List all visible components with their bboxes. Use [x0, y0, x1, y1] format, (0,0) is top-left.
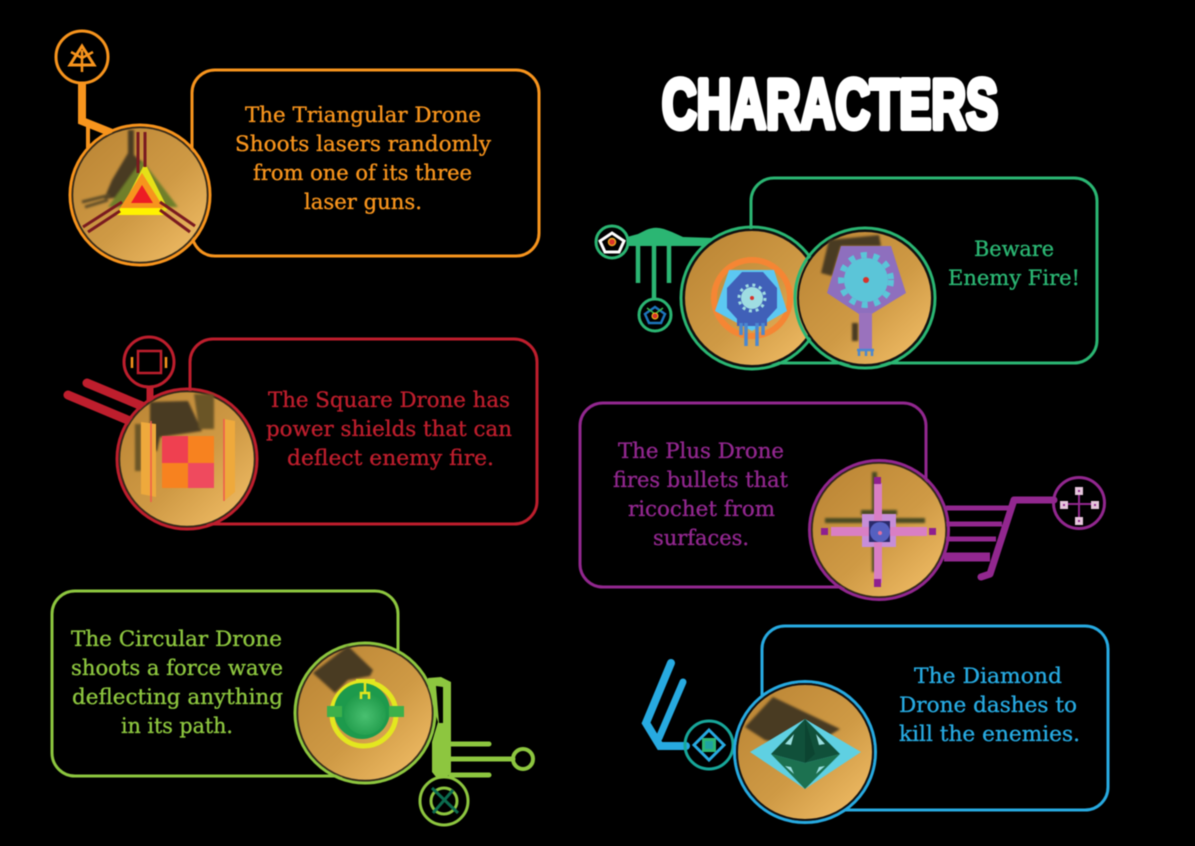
panel: circular drone — [52, 591, 533, 825]
description: diamond drone: Drone dashes to — [899, 693, 1077, 717]
portrait: plus drone — [810, 460, 948, 600]
panel: triangular drone — [56, 31, 539, 265]
panel: square drone — [68, 337, 537, 529]
description: triangular drone: from one of its three — [253, 161, 472, 185]
portrait: shielded pentagon drone — [681, 227, 823, 369]
description: circular drone: The Circular Drone — [71, 627, 282, 651]
panel: plus drone — [580, 403, 1104, 600]
description: circular drone: in its path. — [121, 714, 233, 738]
panel: diamond drone — [646, 626, 1108, 822]
text box: triangular drone — [192, 70, 539, 256]
description: square drone: power shields that can — [266, 417, 512, 441]
portrait: purple pentagon drone — [795, 228, 935, 368]
title: CHARACTERS — [662, 65, 998, 143]
description: square drone — [266, 388, 512, 470]
description: triangular drone: laser guns. — [304, 190, 422, 214]
icon: shielded pentagon badge — [639, 299, 671, 331]
icon: triangle badge — [56, 31, 108, 83]
description: enemy fire: Enemy Fire! — [948, 266, 1080, 290]
description: plus drone — [613, 439, 789, 550]
icon: circle badge — [420, 777, 468, 825]
icon: pentagon badge — [596, 226, 628, 258]
description: plus drone: ricochet from — [628, 497, 775, 521]
portrait: square drone — [117, 389, 257, 529]
description: circular drone: shoots a force wave — [71, 656, 283, 680]
description: plus drone: fires bullets that — [613, 468, 789, 492]
text box: diamond drone — [762, 626, 1108, 810]
connector: triangular drone — [82, 84, 112, 148]
text box: circular drone — [52, 591, 398, 776]
description: square drone: The Square Drone has — [268, 388, 510, 412]
description: diamond drone — [899, 664, 1080, 746]
description: enemy fire: Beware — [974, 237, 1054, 261]
text box: square drone — [190, 339, 537, 524]
description: enemy fire — [948, 237, 1080, 290]
connector: square drone — [68, 383, 150, 421]
description: plus drone: surfaces. — [653, 526, 749, 550]
description: diamond drone: The Diamond — [914, 664, 1062, 688]
icon: diamond badge — [685, 721, 733, 769]
text box: plus drone — [580, 403, 926, 587]
description: diamond drone: kill the enemies. — [899, 722, 1080, 746]
connector: diamond drone — [646, 663, 686, 746]
portrait: circular drone — [295, 643, 435, 783]
connector: plus drone — [944, 500, 1054, 577]
description: triangular drone — [235, 103, 491, 214]
description: triangular drone: The Triangular Drone — [245, 103, 481, 127]
portrait: diamond drone — [734, 682, 876, 822]
connector: circular drone — [428, 677, 533, 777]
icon: plus badge — [1054, 478, 1104, 528]
text box: enemy fire — [751, 178, 1097, 363]
connector: pentagon drones — [627, 228, 714, 300]
description: circular drone — [71, 627, 283, 738]
portrait: triangular drone — [70, 125, 210, 265]
description: circular drone: deflecting anything — [72, 685, 283, 709]
icon: square badge — [124, 337, 174, 387]
panel: pentagon drones — [596, 178, 1097, 369]
description: plus drone: The Plus Drone — [618, 439, 784, 463]
description: square drone: deflect enemy fire. — [287, 446, 494, 470]
description: triangular drone: Shoots lasers randomly — [235, 132, 491, 156]
